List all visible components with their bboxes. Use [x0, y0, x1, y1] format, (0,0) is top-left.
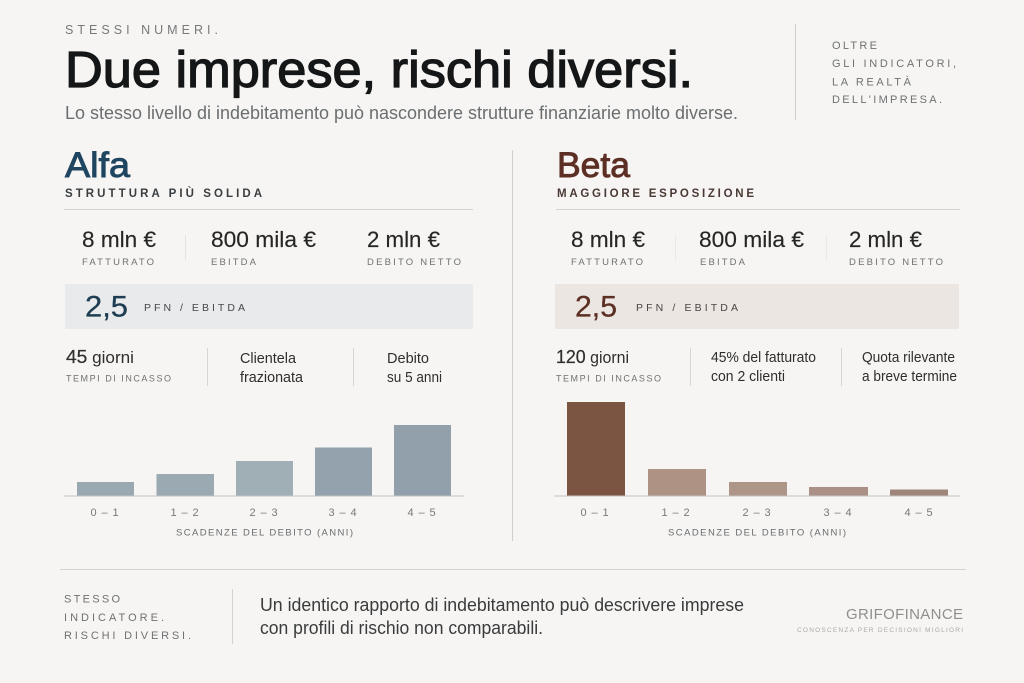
Beta bar chart [554, 402, 960, 538]
brand: CONOSCENZA PER DECISIONI MIGLIORI [797, 627, 963, 634]
footer statement: con profili di rischio non comparabili. [260, 618, 543, 638]
Beta qualitative facts: a breve termine [862, 369, 957, 385]
Beta bar chart: 0 – 1 [581, 507, 609, 519]
footer statement [260, 595, 744, 638]
Alfa key figures: 800 mila € [211, 227, 316, 252]
Alfa qualitative facts [66, 346, 442, 386]
Alfa qualitative facts: 45 giorni [66, 346, 134, 367]
header side note: OLTRE [832, 40, 877, 52]
brand: GRIFOFINANCE [846, 606, 963, 623]
central divider [512, 150, 514, 541]
Alfa key figures [82, 227, 461, 268]
Alfa bar chart: SCADENZE DEL DEBITO (ANNI) [176, 528, 353, 538]
brand [797, 606, 963, 634]
Alfa bar chart: 3 – 4 [329, 507, 357, 519]
Alfa subheading: STRUTTURA PIÙ SOLIDA [65, 187, 262, 200]
Alfa PFN/EBITDA band [65, 284, 473, 329]
Beta bar chart: 2 – 3 [743, 507, 771, 519]
Beta PFN/EBITDA band: PFN / EBITDA [636, 302, 738, 314]
Beta PFN/EBITDA band [555, 284, 959, 329]
Alfa heading: Alfa [65, 146, 131, 185]
Alfa bar chart: 2 – 3 [250, 507, 278, 519]
footer tagline: RISCHI DIVERSI. [64, 630, 191, 642]
Beta bar chart: SCADENZE DEL DEBITO (ANNI) [668, 528, 846, 538]
Alfa key figures: EBITDA [211, 257, 257, 268]
Beta bar chart: 4 – 5 [905, 507, 933, 519]
footer tagline: STESSO [64, 594, 120, 606]
footer tagline [64, 594, 191, 642]
header side note [796, 24, 956, 120]
Beta qualitative facts: TEMPI DI INCASSO [556, 374, 661, 384]
footer tagline: INDICATORE. [64, 612, 164, 624]
Beta key figures: FATTURATO [571, 257, 643, 268]
Beta bar chart: 1 – 2 [662, 507, 690, 519]
Beta qualitative facts: 45% del fatturato [711, 350, 816, 366]
Alfa PFN/EBITDA band: 2,5 [85, 290, 128, 324]
Alfa qualitative facts: TEMPI DI INCASSO [66, 374, 171, 384]
Beta key figures: 800 mila € [699, 227, 804, 252]
Beta key figures: 2 mln € [849, 227, 922, 252]
Alfa key figures: 8 mln € [82, 227, 156, 252]
footer statement: Un identico rapporto di indebitamento può descrivere imprese [260, 595, 744, 615]
Alfa key figures: DEBITO NETTO [367, 257, 461, 268]
Alfa PFN/EBITDA band: PFN / EBITDA [144, 302, 245, 314]
Alfa bar chart: 0 – 1 [91, 507, 119, 519]
panel: Beta [554, 146, 960, 538]
Alfa qualitative facts: frazionata [240, 370, 304, 386]
Alfa key figures: 2 mln € [367, 227, 440, 252]
Beta subheading: MAGGIORE ESPOSIZIONE [557, 188, 754, 200]
Beta key figures: DEBITO NETTO [849, 257, 943, 268]
header side note: DELL'IMPRESA. [832, 94, 942, 106]
header side note: LA REALTÀ [832, 76, 912, 88]
Alfa bar chart: 4 – 5 [408, 507, 436, 519]
Beta bar chart: 3 – 4 [824, 507, 852, 519]
Beta qualitative facts: con 2 clienti [711, 369, 785, 385]
Alfa qualitative facts: Debito [387, 351, 429, 367]
Beta qualitative facts: Quota rilevante [862, 350, 955, 366]
footer [60, 570, 966, 644]
title: Due imprese, rischi diversi. [65, 41, 693, 98]
header [65, 23, 956, 123]
Alfa bar chart [64, 425, 464, 538]
Beta qualitative facts: 120 giorni [556, 346, 629, 367]
Alfa bar chart: 1 – 2 [171, 507, 199, 519]
subtitle: Lo stesso livello di indebitamento può nascondere strutture finanziarie molto diverse. [65, 102, 738, 123]
Beta key figures: EBITDA [700, 257, 746, 268]
eyebrow: STESSI NUMERI. [65, 23, 218, 37]
Alfa key figures: FATTURATO [82, 257, 154, 268]
Alfa qualitative facts: Clientela [240, 351, 297, 367]
Beta key figures: 8 mln € [571, 227, 645, 252]
panel: Alfa [64, 146, 473, 538]
Beta heading: Beta [557, 146, 631, 185]
Beta key figures [571, 227, 943, 268]
Alfa qualitative facts: su 5 anni [387, 370, 442, 386]
Beta PFN/EBITDA band: 2,5 [575, 290, 617, 324]
header side note: GLI INDICATORI, [832, 58, 956, 70]
Beta qualitative facts [556, 346, 957, 386]
